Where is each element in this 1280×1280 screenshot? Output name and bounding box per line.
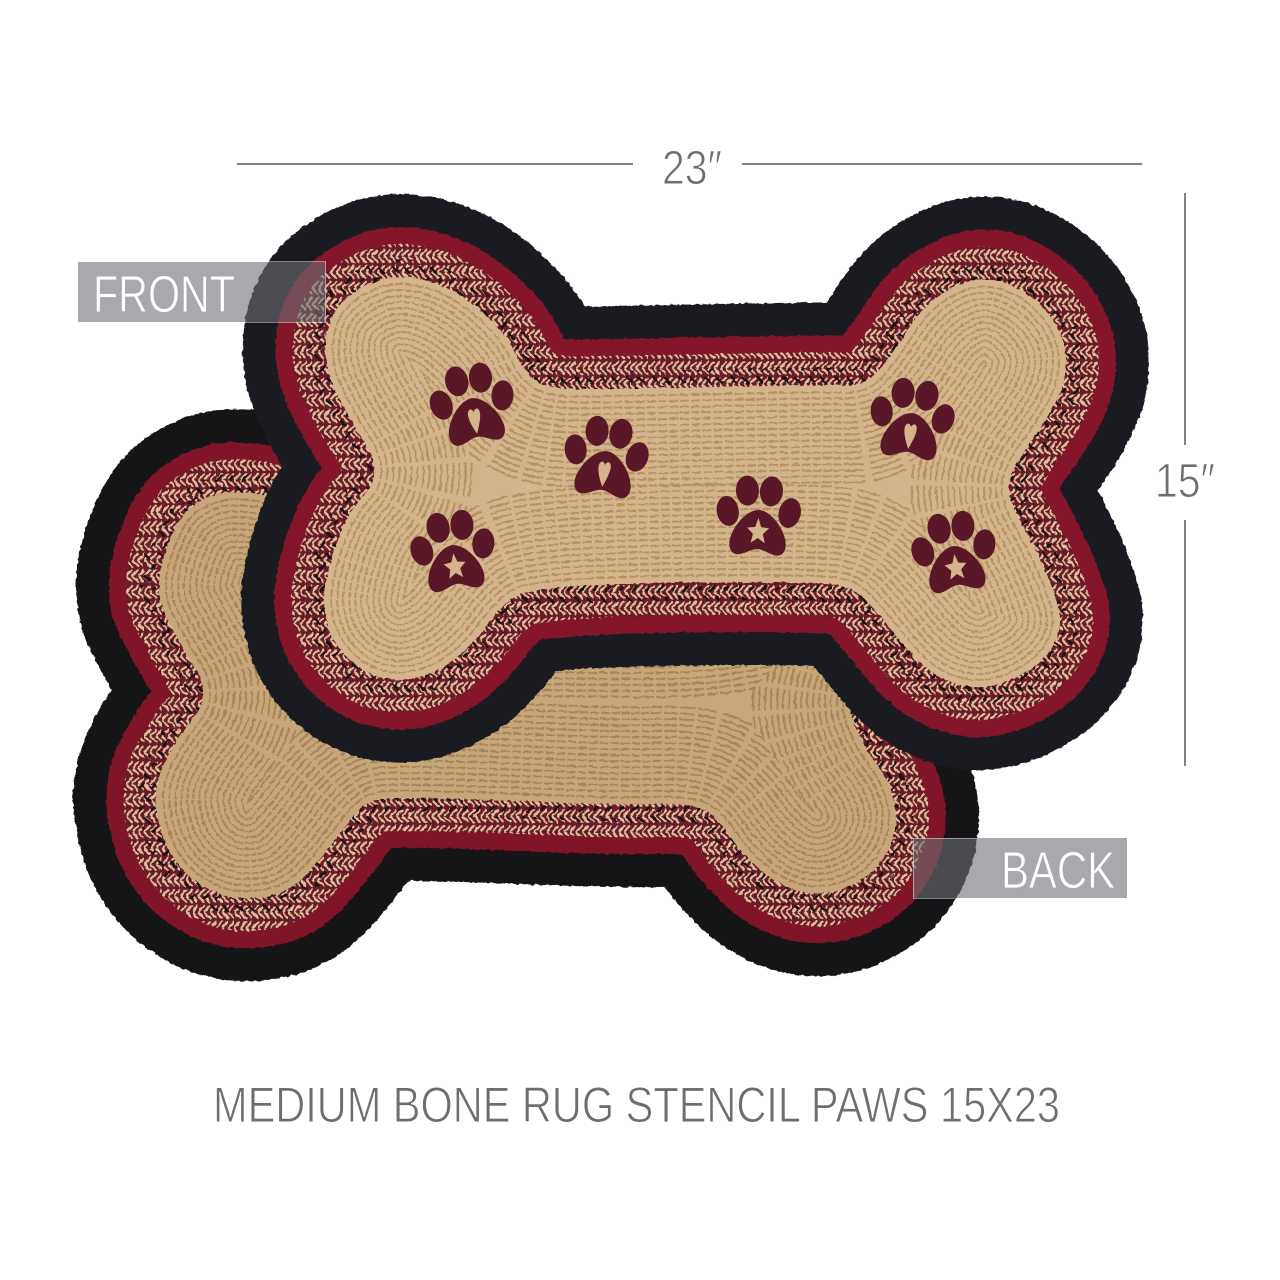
front rug: [324, 277, 1066, 687]
front rug red band: [324, 277, 1066, 687]
height dimension: 15 inches: 15″: [1155, 455, 1215, 508]
paw prints: [404, 357, 1003, 596]
front rug jute centre: [324, 277, 1066, 687]
label: front: [78, 262, 326, 324]
width dimension: 23 inches: 23″: [662, 142, 722, 195]
back rug red band: [156, 492, 898, 898]
front rug black border: [324, 277, 1066, 687]
back rug braided band: [156, 492, 898, 898]
product title: MEDIUM BONE RUG STENCIL PAWS 15X23: [213, 1077, 1060, 1133]
icon: paw with star, lower left: [404, 505, 502, 595]
icon: paw with heart, upper left: [422, 357, 523, 450]
label: back: BACK: [1001, 842, 1115, 900]
icon: paw with star, centre right: [712, 474, 805, 556]
back rug black border: [156, 492, 898, 898]
icon: paw with heart, upper right: [863, 373, 961, 463]
label: front: FRONT: [93, 266, 235, 324]
front rug braided band: [324, 277, 1066, 687]
icon: paw with star, lower right: [905, 506, 1003, 596]
back rug jute centre: [156, 492, 898, 898]
label: back: [913, 838, 1127, 900]
back rug: [156, 492, 898, 898]
icon: paw with heart, centre left: [557, 411, 655, 501]
